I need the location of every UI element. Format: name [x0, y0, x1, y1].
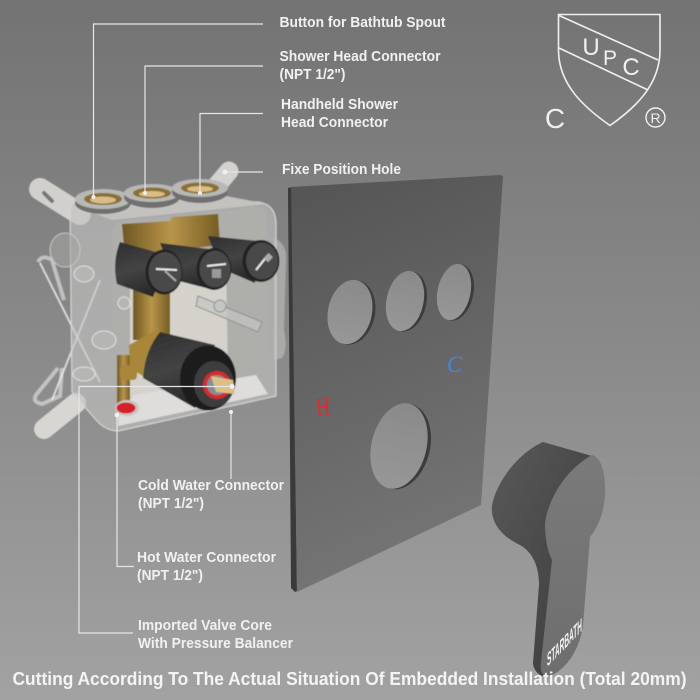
brass side fitting	[120, 365, 137, 380]
handle dark side	[492, 442, 592, 677]
label: shower head connector: (NPT 1/2")	[280, 67, 346, 83]
leader: fixed position hole	[225, 171, 263, 173]
box interior rear wall	[113, 207, 268, 424]
label: hot water connector: Hot Water Connector	[137, 550, 276, 566]
label: imported valve core	[138, 618, 293, 652]
label: cold mark: C	[447, 352, 463, 377]
clip detail: left side screws	[73, 266, 130, 381]
leader: handheld shower	[200, 114, 263, 193]
label: imported valve core: With Pressure Balancer	[138, 636, 293, 652]
registered mark: R	[650, 110, 661, 126]
left round knockout	[50, 233, 80, 267]
callout labels	[137, 15, 446, 652]
interior floor	[118, 375, 268, 426]
top port: handheld shower	[172, 179, 228, 203]
label: cold water connector: (NPT 1/2")	[138, 496, 204, 512]
knob: middle (shower head)	[160, 243, 232, 290]
top port: bathtub spout	[75, 189, 131, 214]
brass vertical column	[133, 290, 170, 340]
label: hot mark: H	[315, 393, 331, 422]
red hot water port	[115, 400, 139, 416]
leader end dots	[92, 170, 234, 418]
box top rim	[72, 192, 268, 220]
shield outline	[558, 14, 660, 126]
icon: lever handle: STARBATH	[547, 614, 582, 671]
label: hot water connector: (NPT 1/2")	[137, 568, 203, 584]
right mounting wing	[274, 238, 286, 360]
translucent box shell	[70, 198, 276, 431]
icon: UPC certification shield	[545, 14, 665, 134]
brass inlet pipe	[117, 355, 130, 405]
label: handheld shower connector	[281, 97, 398, 131]
label: imported valve core: Imported Valve Core	[138, 618, 272, 634]
icon: lever handle	[492, 442, 605, 677]
leader lines	[79, 24, 263, 633]
leader: hot water	[117, 415, 134, 566]
clip detail: right side clips	[196, 296, 262, 332]
label: shower head connector: Shower Head Connector	[280, 49, 441, 65]
shield banner stripes	[559, 16, 658, 90]
plate face	[291, 175, 503, 592]
shield letter P: P	[603, 47, 617, 70]
mounting tab: top right	[208, 171, 229, 196]
top port: shower head	[124, 184, 180, 208]
leader: bathtub spout	[94, 24, 263, 197]
label: handheld shower connector: Handheld Shower	[281, 97, 398, 113]
leader: cold water	[230, 412, 232, 479]
leader: valve core	[79, 386, 232, 633]
label: hot water connector	[137, 550, 276, 584]
knob: right (hand shower)	[208, 236, 280, 283]
plate thickness edge	[288, 187, 297, 592]
brass manifold	[122, 214, 220, 256]
mounting tab: top left	[40, 189, 80, 214]
mounting tab: bottom left	[44, 403, 76, 429]
certification letter C: C	[545, 103, 565, 134]
mounting strap: left wing	[35, 257, 100, 404]
lit centre wall	[130, 262, 228, 405]
valve core brass stem	[211, 376, 235, 394]
handle front face	[541, 455, 605, 677]
hole: right button	[432, 261, 479, 324]
knob: left (tub spout)	[115, 242, 182, 297]
brass valve sleeve	[129, 329, 168, 378]
hole: middle button	[381, 267, 432, 335]
panel: valve box assembly	[35, 171, 286, 431]
label: cold water connector: Cold Water Connector	[138, 478, 284, 494]
panel: cover plate with cut-outs	[288, 175, 503, 592]
label: cold water connector	[138, 478, 284, 512]
hole: mixer valve	[362, 397, 440, 496]
valve cylinder	[143, 332, 236, 410]
label: handheld shower connector: Head Connector	[281, 115, 388, 131]
label: fixed position hole: Fixe Position Hole	[282, 162, 401, 178]
label: shower head connector	[280, 49, 441, 83]
leader: shower head	[145, 66, 263, 193]
hole: left button	[322, 276, 381, 349]
label: bathtub spout: Button for Bathtub Spout	[280, 15, 446, 31]
shield letter U: U	[582, 34, 600, 61]
shield letter C: C	[622, 54, 640, 81]
valve core red seal	[203, 371, 231, 399]
